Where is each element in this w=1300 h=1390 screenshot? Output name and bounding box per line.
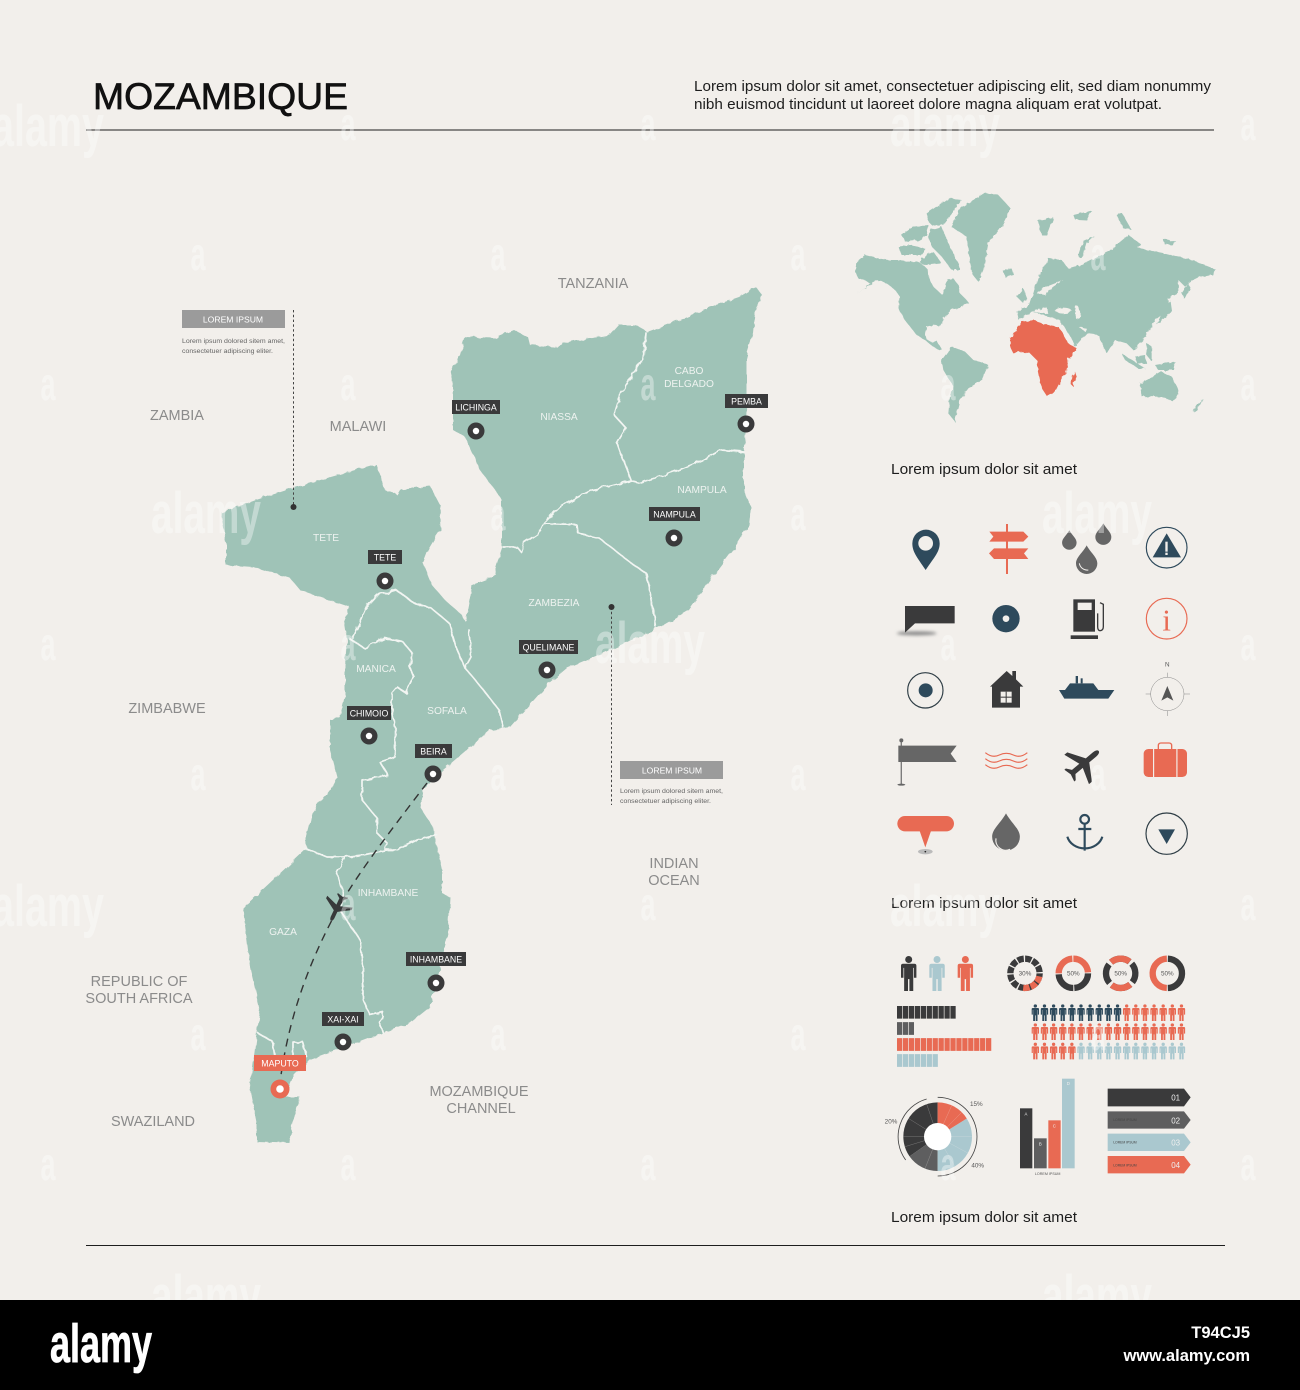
- column chart: C: [1053, 1123, 1056, 1128]
- callout: lower right: Lorem ipsum dolored sitem amet,: [620, 788, 723, 795]
- watermark overlay: a: [940, 1138, 956, 1190]
- neighbouring country labels: [85, 276, 700, 1130]
- city: Chimoio: [347, 706, 391, 744]
- watermark overlay: a: [340, 618, 356, 670]
- watermark overlay: a: [1240, 618, 1256, 670]
- province labels: SOFALA: [427, 706, 467, 717]
- neighbouring country labels: ZIMBABWE: [128, 701, 206, 717]
- people icons: [901, 956, 973, 991]
- province labels: GAZA: [269, 927, 297, 938]
- watermark overlay: a: [1240, 98, 1256, 150]
- column chart: D: [1067, 1081, 1070, 1086]
- neighbouring country labels: INDIAN: [649, 856, 699, 872]
- icon: water drops: [1062, 523, 1111, 574]
- donut: 50% split: [1059, 959, 1088, 988]
- city: Pemba: PEMBA: [731, 396, 762, 406]
- neighbouring country labels: REPUBLIC OF: [91, 974, 187, 990]
- arrow 02: LOREM IPSUM: [1113, 1118, 1137, 1122]
- heading: closing section: Lorem ipsum dolor sit amet: [891, 1209, 1078, 1226]
- watermark overlay: a: [790, 488, 806, 540]
- watermark overlay: a: [490, 228, 506, 280]
- icon: compass: N: [1165, 662, 1170, 669]
- watermark overlay: a: [40, 358, 56, 410]
- infographic elements: [885, 953, 1191, 1176]
- watermark overlay: a: [1090, 748, 1106, 800]
- people pictogram grid: [1032, 1004, 1185, 1059]
- watermark overlay: alamy: [1042, 481, 1152, 546]
- arrow 01: 01: [1171, 1094, 1181, 1103]
- icon: speech banner: [897, 606, 955, 635]
- neighbouring country labels: CHANNEL: [446, 1101, 516, 1117]
- intro text block: nibh euismod tincidunt ut laoreet dolore magna aliquam erat volutpat.: [694, 96, 1162, 113]
- icon: red map pin: [897, 816, 954, 854]
- arrow 02: [1108, 1111, 1191, 1129]
- world map: [855, 193, 1216, 424]
- neighbouring country labels: MALAWI: [330, 419, 386, 435]
- icon: plane on route: [318, 889, 356, 927]
- watermark overlay: alamy: [890, 94, 1000, 159]
- watermark overlay: a: [340, 1138, 356, 1190]
- watermark overlay: alamy: [595, 611, 705, 676]
- watermark overlay: a: [340, 98, 356, 150]
- icon: house: [990, 671, 1023, 708]
- icon: suitcase: [1144, 743, 1187, 777]
- intro text block: [694, 78, 1211, 113]
- neighbouring country labels: OCEAN: [648, 873, 700, 889]
- city: Xai-Xai: XAI-XAI: [327, 1014, 359, 1024]
- arrow 04: [1108, 1156, 1191, 1173]
- image id: T94CJ5: [1191, 1324, 1250, 1342]
- footer logo: alamy: [50, 1314, 152, 1374]
- icon: disc: [992, 605, 1020, 632]
- watermark overlay: a: [1090, 228, 1106, 280]
- flight route: [281, 783, 427, 1075]
- watermark overlay: a: [640, 358, 656, 410]
- watermark overlay: alamy: [151, 1264, 261, 1329]
- watermark overlay: alamy: [890, 874, 1000, 939]
- city: Maputo (capital): MAPUTO: [261, 1058, 299, 1068]
- callout: lower right: [608, 604, 723, 805]
- city: Lichinga: LICHINGA: [455, 402, 497, 412]
- icon: waves: [985, 753, 1027, 768]
- province labels: CABO: [675, 366, 704, 377]
- neighbouring country labels: TANZANIA: [558, 276, 629, 292]
- watermark overlay: a: [940, 358, 956, 410]
- icon: oil drop: [992, 813, 1020, 851]
- numbered arrow list: [1108, 1089, 1191, 1173]
- watermark overlay: a: [190, 1008, 206, 1060]
- donut: 50% split: 50%: [1067, 971, 1080, 978]
- icon: flag: [897, 738, 957, 786]
- watermark overlay: a: [640, 98, 656, 150]
- column chart: B: [1039, 1141, 1042, 1146]
- city: Beira: BEIRA: [420, 746, 447, 756]
- province labels: DELGADO: [664, 379, 714, 390]
- icon: target: [908, 673, 943, 708]
- icon: compass: [1146, 662, 1190, 716]
- province labels: NIASSA: [540, 412, 578, 423]
- arrow 03: [1108, 1134, 1191, 1151]
- watermark overlay: a: [640, 878, 656, 930]
- watermark overlay: a: [190, 748, 206, 800]
- city: Inhambane: [406, 952, 466, 992]
- watermark overlay: a: [190, 228, 206, 280]
- icon: fuel pump: [1071, 599, 1103, 639]
- watermark overlay: a: [640, 1138, 656, 1190]
- city: Chimoio: CHIMOIO: [350, 708, 388, 718]
- footer band: [0, 1300, 1300, 1390]
- watermark overlay: a: [490, 488, 506, 540]
- city: Nampula: [649, 507, 700, 546]
- watermark overlay: a: [340, 358, 356, 410]
- callout: lower right: LOREM IPSUM: [642, 766, 702, 776]
- province labels: ZAMBEZIA: [529, 598, 580, 609]
- watermark overlay: a: [490, 1008, 506, 1060]
- province labels: [269, 366, 727, 938]
- neighbouring country labels: ZAMBIA: [150, 408, 204, 424]
- city: Xai-Xai: [322, 1012, 364, 1050]
- watermark overlay: a: [1240, 878, 1256, 930]
- city: Nampula: NAMPULA: [653, 510, 696, 520]
- province labels: INHAMBANE: [358, 888, 418, 899]
- watermark overlay: a: [340, 878, 356, 930]
- callout: upper left: [182, 310, 296, 510]
- column chart: [1020, 1079, 1075, 1176]
- city: Tete: [368, 550, 402, 590]
- city: Tete: TETE: [374, 552, 396, 562]
- callout: upper left: LOREM IPSUM: [203, 314, 263, 324]
- pie chart: 15%: [970, 1101, 983, 1108]
- icon: plane: [1057, 736, 1111, 790]
- city: Quelimane: [519, 640, 578, 678]
- province labels: TETE: [313, 533, 339, 544]
- icon: info: i: [1162, 604, 1171, 638]
- city: Lichinga: [452, 400, 500, 440]
- heading: icons section: Lorem ipsum dolor sit amet: [891, 461, 1078, 478]
- icon: location pin: [912, 530, 940, 570]
- arrow 03: 03: [1171, 1138, 1181, 1147]
- title: MOZAMBIQUE: [93, 75, 348, 117]
- watermark overlay: a: [940, 618, 956, 670]
- pie chart: [885, 1097, 984, 1176]
- highlighted continent: Africa: [1010, 320, 1077, 396]
- watermark overlay: a: [490, 748, 506, 800]
- watermark overlay: alamy: [151, 481, 261, 546]
- neighbouring country labels: SOUTH AFRICA: [85, 991, 193, 1007]
- watermark overlay: a: [790, 748, 806, 800]
- arrow 04: LOREM IPSUM: [1113, 1163, 1137, 1167]
- province labels: MANICA: [356, 664, 396, 675]
- donut: 50% half: 50%: [1161, 971, 1174, 978]
- pie chart: 20%: [885, 1119, 898, 1126]
- column chart: A: [1025, 1111, 1028, 1116]
- icon: anchor: [1067, 815, 1102, 851]
- city: Pemba: [725, 394, 768, 432]
- donut: 30%: [1008, 956, 1042, 991]
- pie chart: 40%: [971, 1162, 984, 1169]
- watermark overlay: a: [1240, 1138, 1256, 1190]
- donut: 50% half: [1152, 958, 1182, 989]
- watermark overlay: alamy: [1042, 1264, 1152, 1329]
- intro text block: Lorem ipsum dolor sit amet, consectetuer adipiscing elit, sed diam nonummy: [694, 78, 1211, 95]
- donut: 30%: 30%: [1019, 971, 1032, 978]
- callout: lower right: consectetuer adipiscing eliter.: [620, 798, 711, 805]
- map: Mozambique: [221, 287, 768, 1143]
- watermark overlay: a: [790, 1008, 806, 1060]
- column chart: LOREM IPSUM: [1035, 1172, 1060, 1176]
- watermark overlay: a: [40, 1138, 56, 1190]
- icon: warning: [1146, 527, 1187, 568]
- arrow 04: 04: [1171, 1161, 1181, 1170]
- arrow 02: 02: [1171, 1116, 1181, 1125]
- city: Inhambane: INHAMBANE: [410, 954, 462, 964]
- watermark overlay: a: [1240, 358, 1256, 410]
- callout: upper left: Lorem ipsum dolored sitem amet,: [182, 338, 285, 345]
- icon: signpost: [989, 524, 1028, 574]
- icon set: [897, 523, 1190, 854]
- donut: 50% quarters: 50%: [1114, 971, 1127, 978]
- watermark overlay: a: [40, 618, 56, 670]
- icon: info: [1146, 598, 1187, 639]
- province labels: NAMPULA: [677, 485, 727, 496]
- icon: ship: [1059, 676, 1114, 699]
- segmented bar chart: [897, 1012, 992, 1060]
- footer url: www.alamy.com: [1122, 1347, 1250, 1365]
- donut: 50% quarters: [1100, 953, 1141, 994]
- arrow 03: LOREM IPSUM: [1113, 1141, 1137, 1145]
- neighbouring country labels: SWAZILAND: [111, 1114, 195, 1130]
- city: Quelimane: QUELIMANE: [523, 642, 575, 652]
- city: Maputo (capital): [254, 1055, 306, 1098]
- neighbouring country labels: MOZAMBIQUE: [429, 1084, 529, 1100]
- heading: charts section: Lorem ipsum dolor sit amet: [891, 895, 1078, 912]
- watermark overlay: a: [1090, 1008, 1106, 1060]
- country outline and province borders: [221, 287, 762, 1143]
- watermark overlay: a: [790, 228, 806, 280]
- callout: upper left: consectetuer adipiscing eliter.: [182, 348, 273, 355]
- icon: down arrow: [1146, 813, 1187, 854]
- city: Beira: [415, 744, 452, 782]
